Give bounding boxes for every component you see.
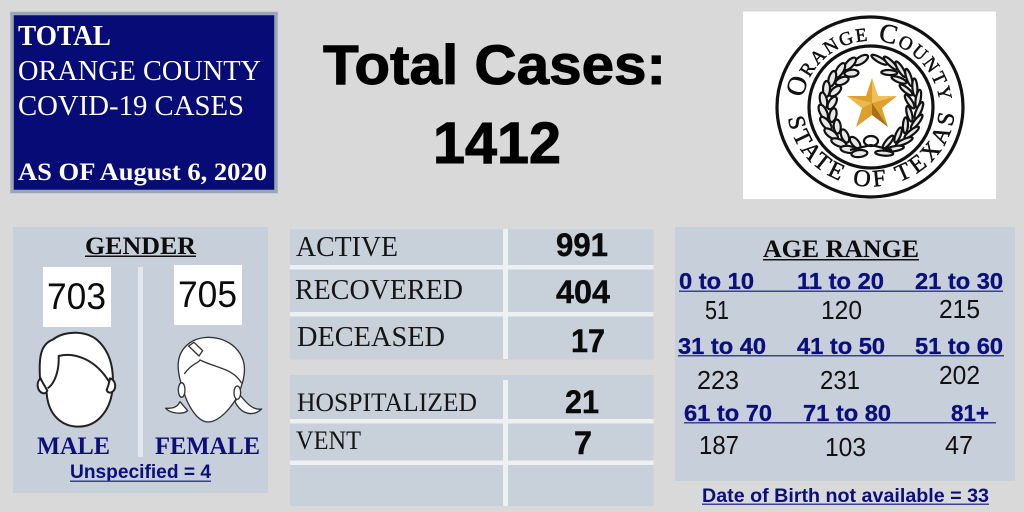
note: unspecified: Unspecified = 4 [70, 462, 211, 483]
row: hospitalized: HOSPITALIZED [297, 388, 477, 417]
note: date of birth not available: Date of Birth not available = 33 [702, 486, 989, 507]
age row: 61 and over: 61 to 70 [684, 400, 772, 426]
age row: 0 to 30: 215 [939, 294, 980, 324]
female count [174, 265, 242, 325]
age row: 0 to 30: 0 to 10 [679, 268, 754, 294]
icon: gold star [847, 78, 897, 127]
title panel: total Orange County COVID-19 cases [12, 14, 276, 192]
row: hospitalized: 21 [565, 384, 599, 420]
heading: total cases: 1412 [433, 111, 561, 176]
logo: Orange County seal: Orange County [787, 24, 952, 98]
age row: 31 to 60 [678, 333, 1004, 395]
label: female: FEMALE [155, 433, 260, 460]
row: recovered [295, 274, 610, 310]
age row: 0 to 30: 51 [705, 295, 729, 325]
male count [43, 267, 111, 327]
age row: 61 and over: 81+ [951, 400, 989, 426]
female count: 705 [178, 274, 237, 315]
row: deceased [297, 321, 605, 359]
age row: 31 to 60: 223 [697, 365, 739, 395]
logo: Orange County seal: STATE OF TEXAS [788, 113, 954, 187]
heading: age range: AGE RANGE [763, 236, 919, 263]
panel: hospital table [290, 375, 654, 506]
age row: 0 to 30: 11 to 20 [797, 268, 884, 294]
row: active: ACTIVE [296, 231, 398, 263]
row: hospitalized [297, 384, 599, 420]
icon: female head [166, 337, 262, 422]
age row: 61 and over [684, 400, 996, 462]
logo: Orange County seal [743, 12, 996, 199]
age row: 61 and over: 103 [825, 432, 866, 462]
row: recovered: 404 [556, 274, 610, 310]
heading: total cases [323, 33, 666, 176]
row: vent: VENT [296, 426, 361, 455]
age row: 0 to 30 [679, 268, 1003, 325]
age row: 61 and over: 71 to 80 [803, 400, 891, 426]
male count: 703 [47, 276, 106, 317]
panel: age range [675, 227, 1015, 481]
panel: gender [13, 227, 268, 493]
age row: 31 to 60: 51 to 60 [915, 333, 1003, 359]
row: active [296, 227, 608, 263]
age row: 31 to 60: 31 to 40 [678, 333, 766, 359]
age row: 31 to 60: 41 to 50 [797, 333, 885, 359]
panel: case status table [290, 227, 654, 360]
icon: wreath [817, 53, 925, 158]
row: recovered: RECOVERED [295, 274, 463, 306]
title panel: total Orange County COVID-19 cases: ORANGE COUNTY [18, 55, 261, 87]
row: deceased: DECEASED [297, 321, 445, 353]
age row: 31 to 60: 231 [820, 365, 860, 395]
row: vent [296, 425, 592, 461]
title panel: total Orange County COVID-19 cases: TOTAL [18, 21, 111, 52]
row: vent: 7 [574, 425, 592, 461]
label: male: MALE [37, 433, 110, 460]
age row: 61 and over: 187 [699, 430, 739, 460]
title panel: total Orange County COVID-19 cases: COVID-19 CASES [18, 90, 244, 122]
age row: 0 to 30: 120 [821, 295, 862, 325]
title panel: total Orange County COVID-19 cases: AS OF August 6, 2020 [18, 159, 267, 186]
age row: 0 to 30: 21 to 30 [915, 268, 1003, 294]
age row: 61 and over: 47 [945, 430, 973, 460]
heading: gender: GENDER [85, 233, 197, 260]
icon: male head [38, 333, 115, 427]
heading: total cases: Total Cases: [323, 33, 666, 96]
row: deceased: 17 [571, 323, 605, 359]
age row: 31 to 60: 202 [939, 360, 980, 390]
row: active: 991 [556, 227, 608, 263]
